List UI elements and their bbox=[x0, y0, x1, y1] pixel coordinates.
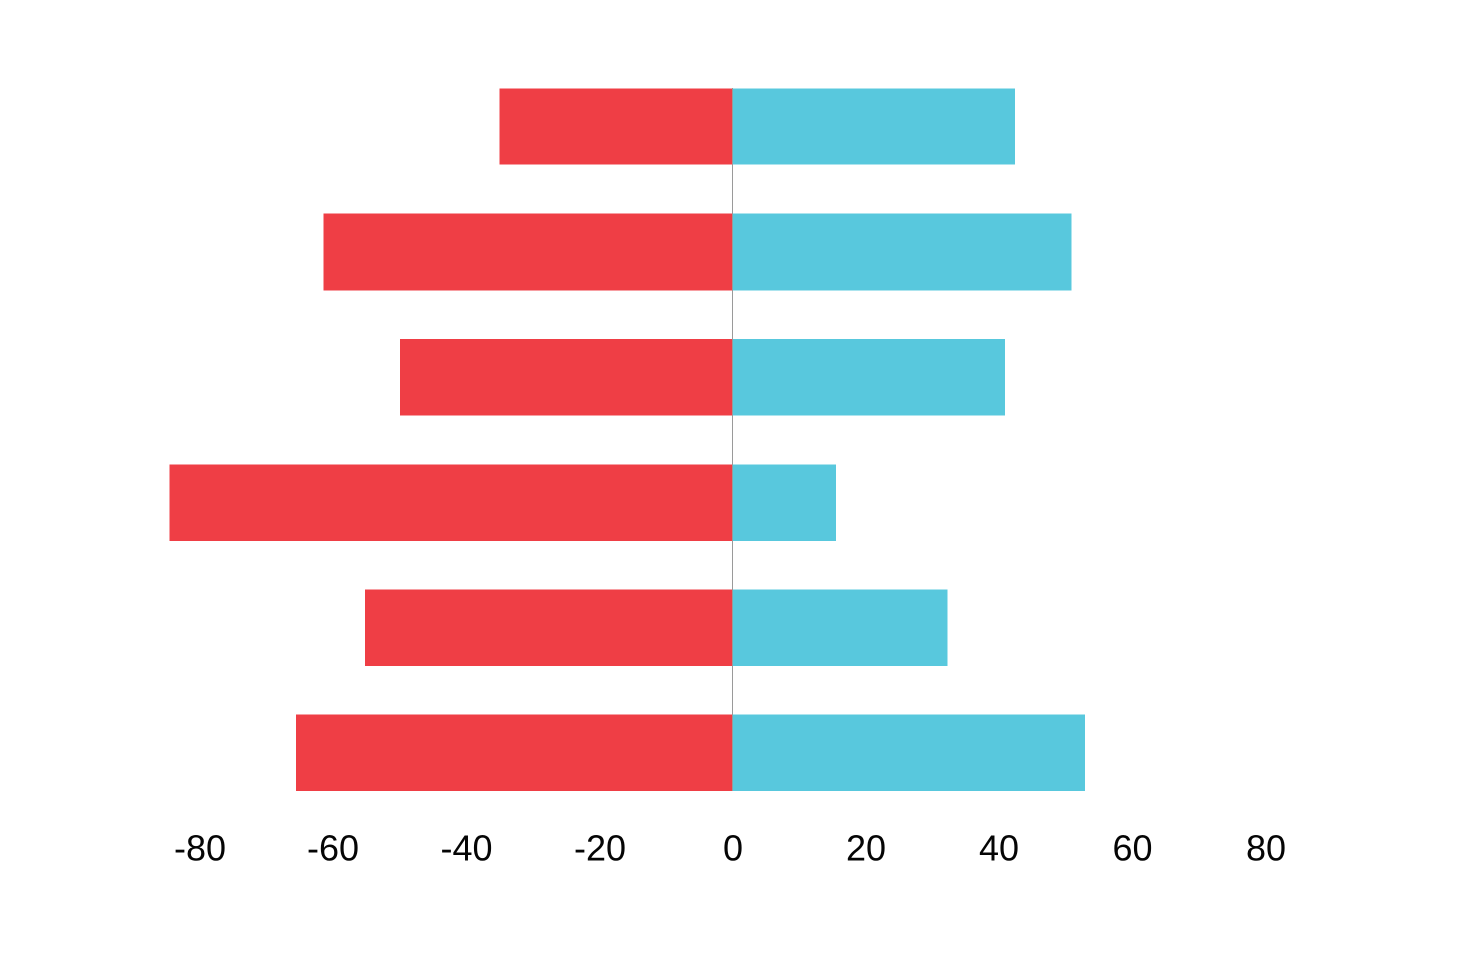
x axis labels: 40 bbox=[979, 828, 1019, 868]
negative bars (red) bbox=[170, 88, 732, 791]
x axis labels: -20 bbox=[574, 828, 626, 868]
x axis labels: 60 bbox=[1112, 828, 1153, 868]
positive bars (blue) bbox=[732, 88, 1085, 791]
x axis labels: -60 bbox=[307, 828, 359, 868]
x axis labels: -40 bbox=[440, 828, 493, 868]
x axis labels: 80 bbox=[1246, 828, 1286, 868]
x axis labels: 0 bbox=[723, 828, 743, 868]
x axis labels bbox=[174, 828, 1286, 868]
x axis labels: 20 bbox=[846, 828, 886, 868]
zero axis line bbox=[732, 88, 734, 791]
x axis labels: -80 bbox=[174, 828, 226, 868]
